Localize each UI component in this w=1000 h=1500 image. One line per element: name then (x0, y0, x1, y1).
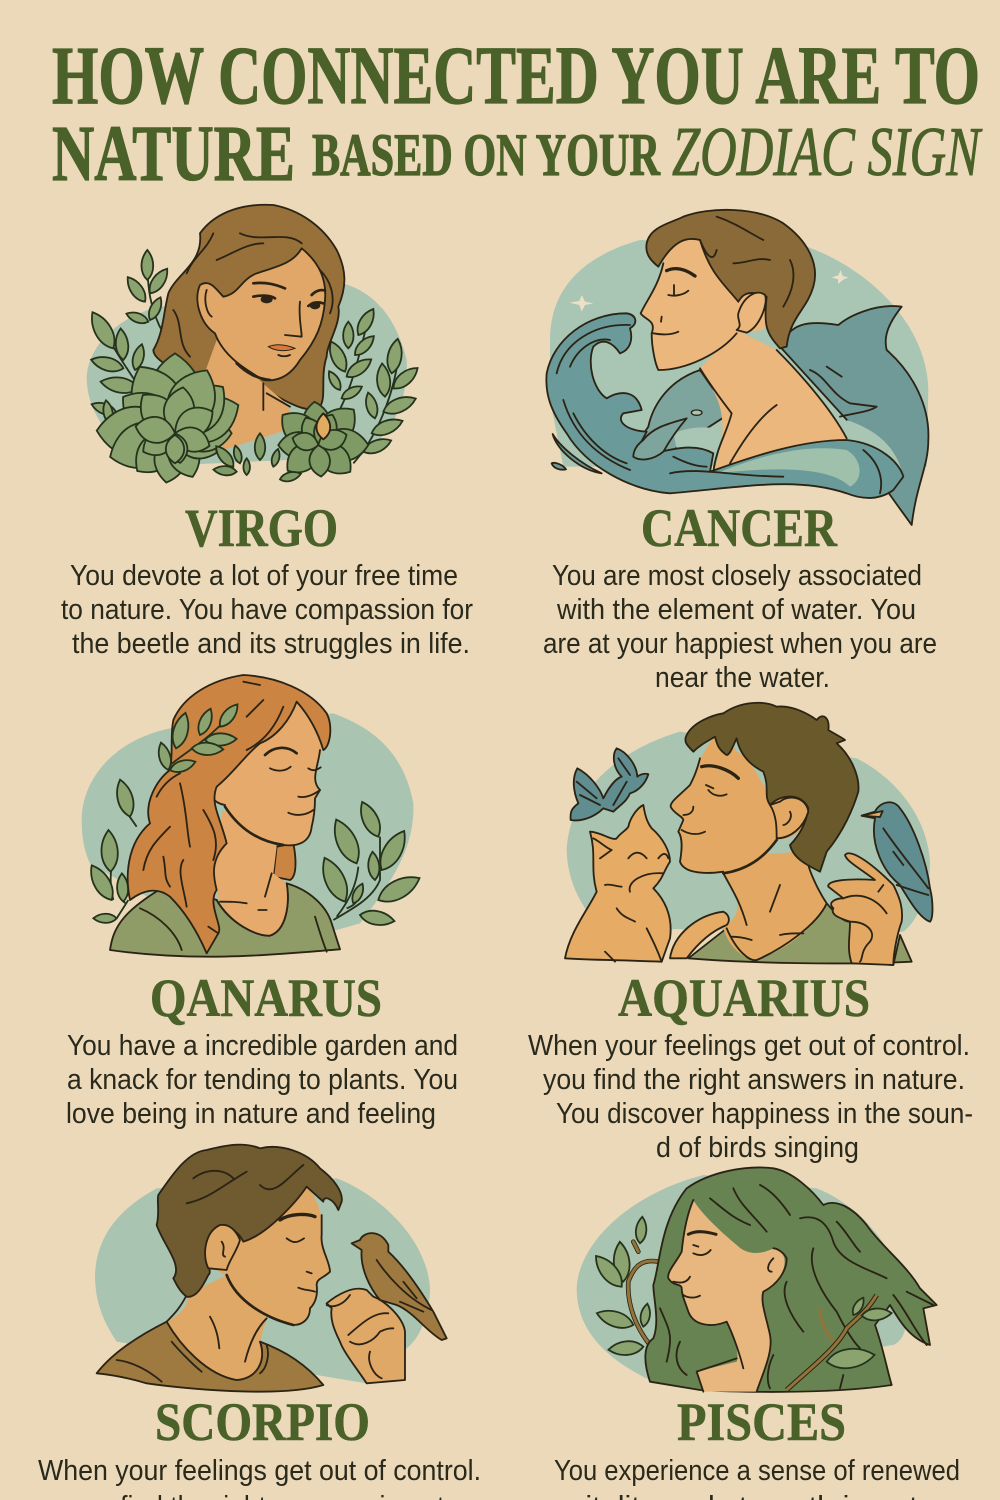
title (52, 29, 982, 198)
text: qanarus description: a knack for tending to plants. You (67, 1064, 458, 1096)
panel: cancer (543, 210, 937, 694)
panel: aquarius (528, 703, 973, 1164)
text: virgo description: the beetle and its struggles in life. (72, 628, 470, 660)
text: virgo description (61, 560, 473, 660)
text: scorpio description: When your feelings get out of control. (38, 1455, 481, 1487)
illustration: virgo woman with leaves (85, 205, 422, 485)
heading: aquarius: AQUARIUS (618, 968, 870, 1028)
title: NATURE (52, 111, 295, 198)
text: virgo description: You devote a lot of your free time (70, 560, 458, 592)
text: cancer description: You are most closely associated (552, 560, 922, 592)
title: BASED ON YOUR (312, 122, 660, 188)
text: aquarius description: d of birds singing (656, 1132, 859, 1164)
text: cancer description: with the element of water. You (556, 594, 916, 626)
text: qanarus description (66, 1030, 458, 1130)
heading: scorpio: SCORPIO (155, 1392, 370, 1452)
heading: virgo: VIRGO (185, 498, 338, 558)
illustration: cancer man with wave and dolphin (546, 210, 928, 525)
panel: pisces (554, 1167, 962, 1500)
text: qanarus description: You have a incredible garden and (67, 1030, 458, 1062)
text: cancer description: near the water. (655, 662, 830, 694)
text: cancer description: are at your happiest when you are (543, 628, 937, 660)
panel: scorpio (38, 1145, 490, 1500)
panel: qanarus (66, 675, 458, 1130)
heading: pisces: PISCES (677, 1392, 846, 1452)
panel: virgo (61, 205, 473, 660)
illustration: man with cat, butterfly and bird (565, 703, 932, 965)
text: aquarius description: When your feelings get out of control. (528, 1030, 970, 1062)
heading: qanarus: QANARUS (150, 968, 382, 1028)
text: scorpio description (38, 1455, 490, 1500)
text: pisces description (554, 1455, 962, 1500)
illustration: green-haired woman with bird and branch (577, 1167, 937, 1392)
text: cancer description (543, 560, 937, 694)
illustration: man with brown bird on hand (95, 1145, 447, 1392)
text: qanarus description: love being in nature and feeling (66, 1098, 436, 1130)
illustration: red-haired woman with leaf crown (82, 675, 424, 957)
text: aquarius description (528, 1030, 973, 1164)
text: virgo description: to nature. You have compassion for (61, 594, 473, 626)
text: aquarius description: you find the right answers in nature. (543, 1064, 965, 1096)
heading: cancer: CANCER (641, 498, 838, 558)
